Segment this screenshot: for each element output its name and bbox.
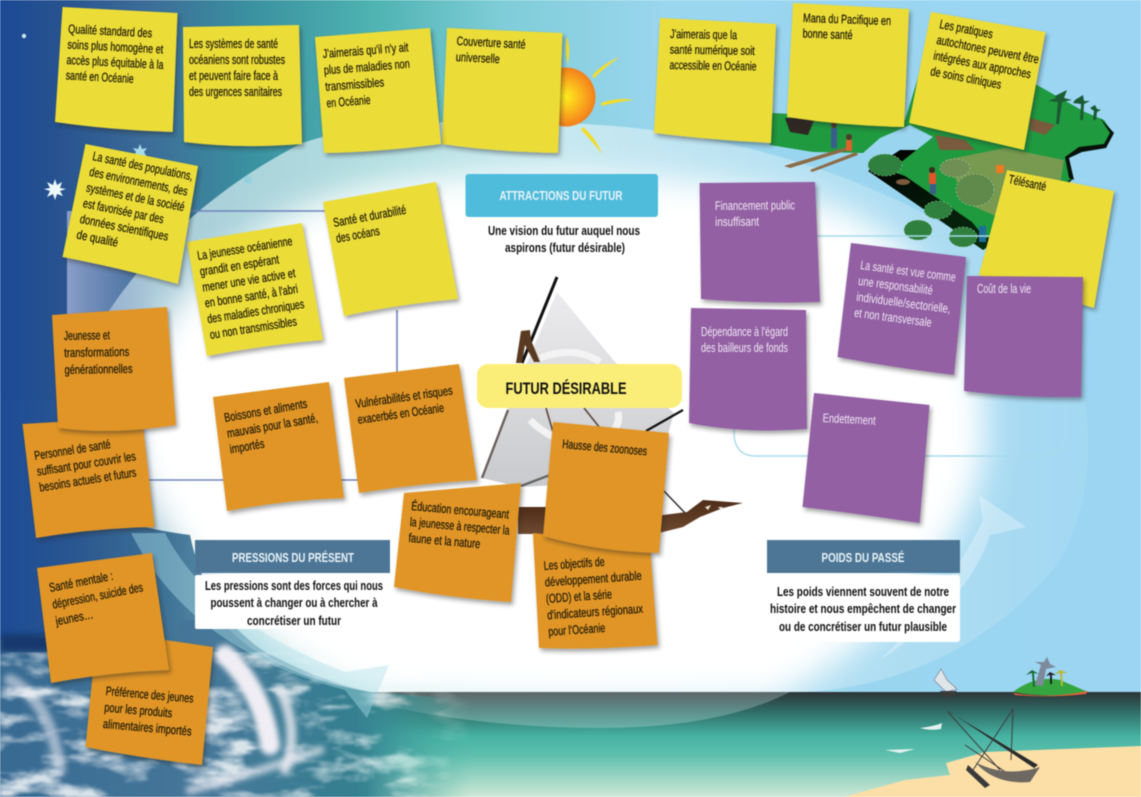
note: objectifs de développement durable: Les objectifs de	[543, 555, 605, 573]
note: éducation	[394, 483, 521, 602]
boat: sailing canoe with emblem sail	[482, 277, 743, 534]
note: hausse des zoonoses: Hausse des zoonoses	[562, 437, 648, 458]
heading: futur désirable	[477, 364, 682, 408]
note: jeunesse océanienne: La jeunesse océanienne	[196, 234, 293, 263]
note: qualité standard: Qualité standard des	[68, 22, 152, 40]
note: jeunesse générationnelles: générationnelles	[64, 362, 133, 377]
note: santé des populations: de qualité	[75, 228, 119, 250]
note: personnel de santé: besoins actuels et futurs	[38, 465, 137, 495]
text: pressions description	[195, 575, 390, 629]
note: santé des populations: La santé des populations,	[91, 149, 194, 183]
connector: pressures frame lines	[147, 211, 397, 480]
text: poids description	[765, 575, 960, 642]
sun	[536, 36, 634, 154]
note: systèmes de santé: Les systèmes de santé	[189, 37, 278, 51]
note: santé des populations: des environnements, des	[88, 165, 189, 199]
note: pratiques autochtones: de soins cliniques	[929, 64, 1003, 92]
note: jeunesse océanienne: en bonne santé, à l'abri	[204, 282, 299, 310]
note: maladies non transmissibles: en Océanie	[326, 93, 371, 110]
sea	[0, 692, 1141, 797]
note: jeunesse générationnelles	[52, 307, 176, 431]
note: boissons et aliments: mauvais pour la santé,	[226, 411, 319, 441]
background: lower left deep water sky	[0, 400, 372, 692]
island: distant palm islet	[1013, 657, 1088, 696]
note: jeunesse océanienne: mener une vie active et	[201, 266, 297, 295]
note: jeunesse océanienne	[187, 223, 323, 356]
note: systèmes de santé: océaniens sont robustes	[189, 53, 285, 67]
note: santé numérique	[654, 18, 776, 143]
note: financement public: Financement public	[715, 198, 795, 213]
star: pale	[133, 144, 147, 161]
star: small dot	[22, 34, 26, 38]
note: systèmes de santé: et peuvent faire face à	[189, 69, 278, 83]
note: pratiques autochtones: Les pratiques	[938, 17, 994, 41]
note: objectifs de développement durable	[533, 533, 658, 649]
note: objectifs de développement durable: pour l'Océanie	[548, 621, 606, 639]
note: responsabilité individuelle	[838, 243, 966, 375]
note: télésanté	[979, 170, 1114, 308]
note: santé des populations: systèmes et de la société	[85, 181, 186, 214]
note: personnel de santé: Personnel de santé	[33, 437, 112, 463]
note: boissons et aliments	[213, 382, 344, 511]
note: couverture santé: Couverture santé	[456, 34, 526, 52]
note: couverture santé	[442, 28, 562, 153]
note: santé numérique: J'aimerais que la	[670, 27, 737, 42]
note: systèmes de santé: des urgences sanitaires	[189, 85, 282, 99]
text: attractions description	[488, 224, 640, 255]
note: santé des océans	[323, 182, 458, 316]
text: pressions description: poussent à changer ou à chercher à	[210, 596, 378, 610]
connector: past weights frame	[734, 236, 1065, 456]
note: endettement: Endettement	[822, 411, 876, 428]
note: mana du Pacifique	[787, 3, 909, 127]
note: financement public: insuffisant	[715, 215, 760, 229]
note: santé des océans: Santé et durabilité	[332, 203, 407, 230]
text: poids description: ou de concrétiser un futur plausible	[779, 620, 947, 634]
boat: beached canoe	[885, 709, 1040, 788]
note: vulnérabilités: Vulnérabilités et risques	[354, 383, 453, 411]
note: qualité standard: accès plus équitable à la	[66, 53, 164, 72]
note: préférence des jeunes	[86, 630, 213, 765]
note: responsabilité individuelle: individuelle/sectorielle,	[855, 290, 951, 316]
island: health village scene	[770, 55, 1114, 250]
note: coût de la vie: Coût de la vie	[977, 282, 1031, 296]
note: jeunesse océanienne: ou non transmissibles	[209, 314, 298, 342]
note: jeunesse générationnelles: Jeunesse et	[64, 328, 110, 343]
note: santé mentale: dépression, suicide des	[51, 580, 144, 612]
heading: poids du passé	[767, 540, 960, 573]
note: endettement	[802, 393, 930, 523]
heading: attractions du futur: ATTRACTIONS DU FUTUR	[500, 188, 623, 203]
note: maladies non transmissibles	[315, 28, 441, 153]
note: santé numérique: accessible en Océanie	[669, 58, 757, 74]
note: éducation: Éducation encourageant	[411, 498, 510, 522]
boat: distant sailboat	[934, 669, 957, 697]
note: éducation: la jeunesse à respecter la	[409, 515, 510, 538]
heading: pressions du présent: PRESSIONS DU PRÉSENT	[232, 550, 354, 565]
note: financement public	[700, 182, 820, 303]
note: santé des populations: est favorisée par des	[82, 196, 165, 226]
text: attractions description: Une vision du futur auquel nous	[488, 224, 640, 238]
note: responsabilité individuelle: une responsabilité	[858, 274, 934, 298]
note: maladies non transmissibles: transmissibles	[325, 75, 385, 94]
background: outer arc band	[60, 121, 1088, 692]
note: dépendance	[689, 308, 807, 431]
background: white vision area	[120, 174, 985, 700]
note: jeunesse générationnelles: transformations	[64, 345, 129, 360]
note: qualité standard: soins plus homogène et	[67, 37, 164, 57]
heading: futur désirable: FUTUR DÉSIRABLE	[506, 379, 626, 398]
note: boissons et aliments: importés	[229, 437, 266, 456]
note: préférence des jeunes: alimentaires importés	[102, 717, 192, 739]
note: objectifs de développement durable: (ODD) et la série	[546, 587, 612, 606]
note: systèmes de santé	[183, 25, 302, 146]
note: préférence des jeunes: Préférence des jeunes	[105, 684, 194, 706]
text: poids description: Les poids viennent souvent de notre	[777, 585, 949, 599]
note: personnel de santé	[22, 417, 154, 538]
text: attractions description: aspirons (futur désirable)	[505, 241, 625, 255]
note: santé des populations	[62, 144, 198, 284]
note: mana du Pacifique: bonne santé	[802, 26, 853, 42]
note: santé mentale	[37, 553, 169, 683]
note: pratiques autochtones: autochtones peuvent être	[935, 33, 1040, 67]
note: hausse des zoonoses	[543, 422, 669, 553]
note: pratiques autochtones: intégrées aux approches	[932, 49, 1032, 81]
note: personnel de santé: suffisant pour couvrir les	[36, 449, 137, 479]
text: poids description: histoire et nous empêchent de changer	[770, 602, 956, 616]
note: objectifs de développement durable: d'indicateurs régionaux	[547, 602, 644, 622]
note: santé mentale: jeunes…	[54, 607, 94, 628]
note: objectifs de développement durable: développement durable	[544, 569, 642, 589]
note: responsabilité individuelle: La santé est vue comme	[860, 258, 957, 285]
arrow: weights sweep	[880, 495, 1026, 660]
note: télésanté: Télésanté	[1007, 172, 1047, 194]
beach	[844, 746, 1141, 797]
note: maladies non transmissibles: plus de maladies non	[323, 57, 410, 77]
note: préférence des jeunes: pour les produits	[104, 700, 173, 720]
note: pratiques autochtones	[909, 12, 1046, 150]
note: qualité standard: santé en Océanie	[65, 68, 134, 86]
note: dépendance: Dépendance à l'égard	[701, 325, 788, 339]
note: mana du Pacifique: Mana du Pacifique en	[803, 11, 891, 28]
text: pressions description: Les pressions sont des forces qui nous	[205, 579, 383, 593]
note: vulnérabilités	[344, 364, 477, 493]
note: vulnérabilités: exacerbés en Océanie	[357, 401, 445, 427]
note: boissons et aliments: Boissons et aliments	[223, 397, 308, 425]
note: couverture santé: universelle	[456, 50, 500, 66]
background: left framed panel	[67, 211, 157, 511]
text: pressions description: concrétiser un futur	[247, 614, 341, 628]
wave: ocean swell	[0, 621, 464, 797]
note: responsabilité individuelle: et non transversale	[853, 306, 933, 330]
note: santé des populations: données scientifiques	[79, 212, 170, 244]
note: éducation: faune et la nature	[408, 531, 481, 551]
star: faint	[244, 176, 252, 184]
ellipse reflection over sea	[330, 692, 790, 728]
note: santé mentale: Santé mentale :	[48, 569, 114, 595]
heading: poids du passé: POIDS DU PASSÉ	[822, 550, 905, 565]
heading: pressions du présent	[195, 540, 390, 573]
note: jeunesse océanienne: des maladies chroniques	[206, 297, 305, 326]
star: bright left	[44, 179, 66, 200]
heading: attractions du futur	[466, 174, 658, 217]
note: santé numérique: santé numérique soit	[670, 42, 755, 58]
note: maladies non transmissibles: J'aimerais qu'il n'y ait	[322, 40, 409, 61]
arrow: pressures sweep	[131, 533, 389, 718]
note: jeunesse océanienne: grandit en espérant	[199, 252, 280, 279]
note: santé des océans: des océans	[335, 224, 381, 246]
note: dépendance: des bailleurs de fonds	[701, 341, 788, 355]
note: coût de la vie	[964, 276, 1083, 397]
note: qualité standard	[55, 7, 178, 132]
